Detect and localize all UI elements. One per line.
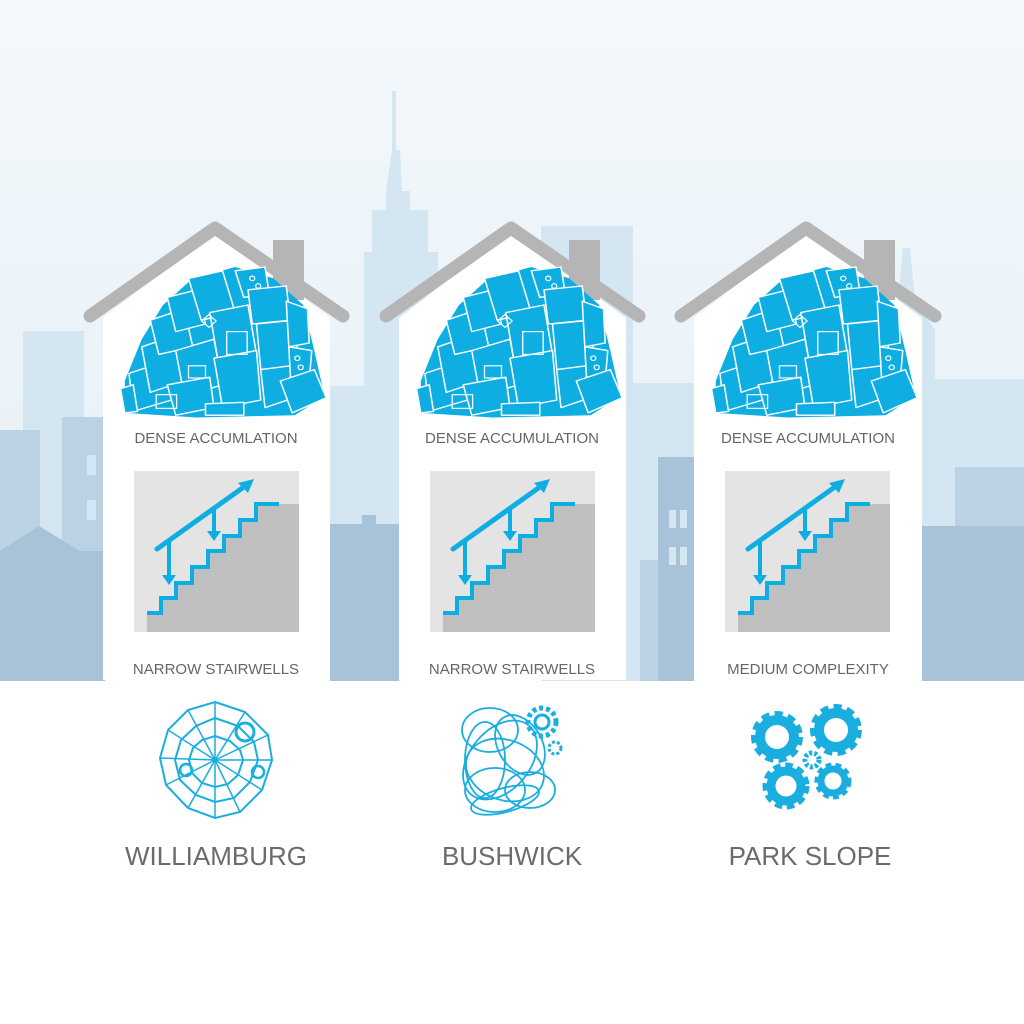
name: Bushwick: BUSHWICK: [442, 841, 583, 871]
house 3: Park Slope: [681, 228, 935, 680]
name: Park Slope: PARK SLOPE: [729, 841, 891, 871]
icon: clutter pile: [120, 267, 326, 417]
icon: clutter pile: [416, 267, 622, 417]
icon: spider web: [160, 702, 272, 818]
icon: stairwell: [134, 471, 299, 632]
icon: tangled scribble with gears: [448, 706, 561, 821]
label: narrow stairwells: NARROW STAIRWELLS: [133, 661, 299, 678]
label: narrow stairwells: NARROW STAIRWELLS: [429, 661, 595, 678]
background sky: [0, 0, 1024, 680]
label: dense accumulation: DENSE ACCUMULATION: [425, 430, 599, 447]
label: dense accumlation: DENSE ACCUMLATION: [134, 430, 298, 447]
icon: stairwell: [430, 471, 595, 632]
house 1: Williamsburg: [90, 228, 343, 680]
label: medium complexity: MEDIUM COMPLEXITY: [727, 661, 889, 678]
label: dense accumulation: DENSE ACCUMULATION: [721, 430, 895, 447]
name: Williamburg: WILLIAMBURG: [125, 841, 307, 871]
house 2: Bushwick: [386, 228, 639, 680]
skyline: [0, 91, 1024, 681]
icon: clutter pile: [712, 267, 917, 417]
icon: stairwell: [725, 471, 890, 632]
icon: gears: [757, 710, 856, 804]
